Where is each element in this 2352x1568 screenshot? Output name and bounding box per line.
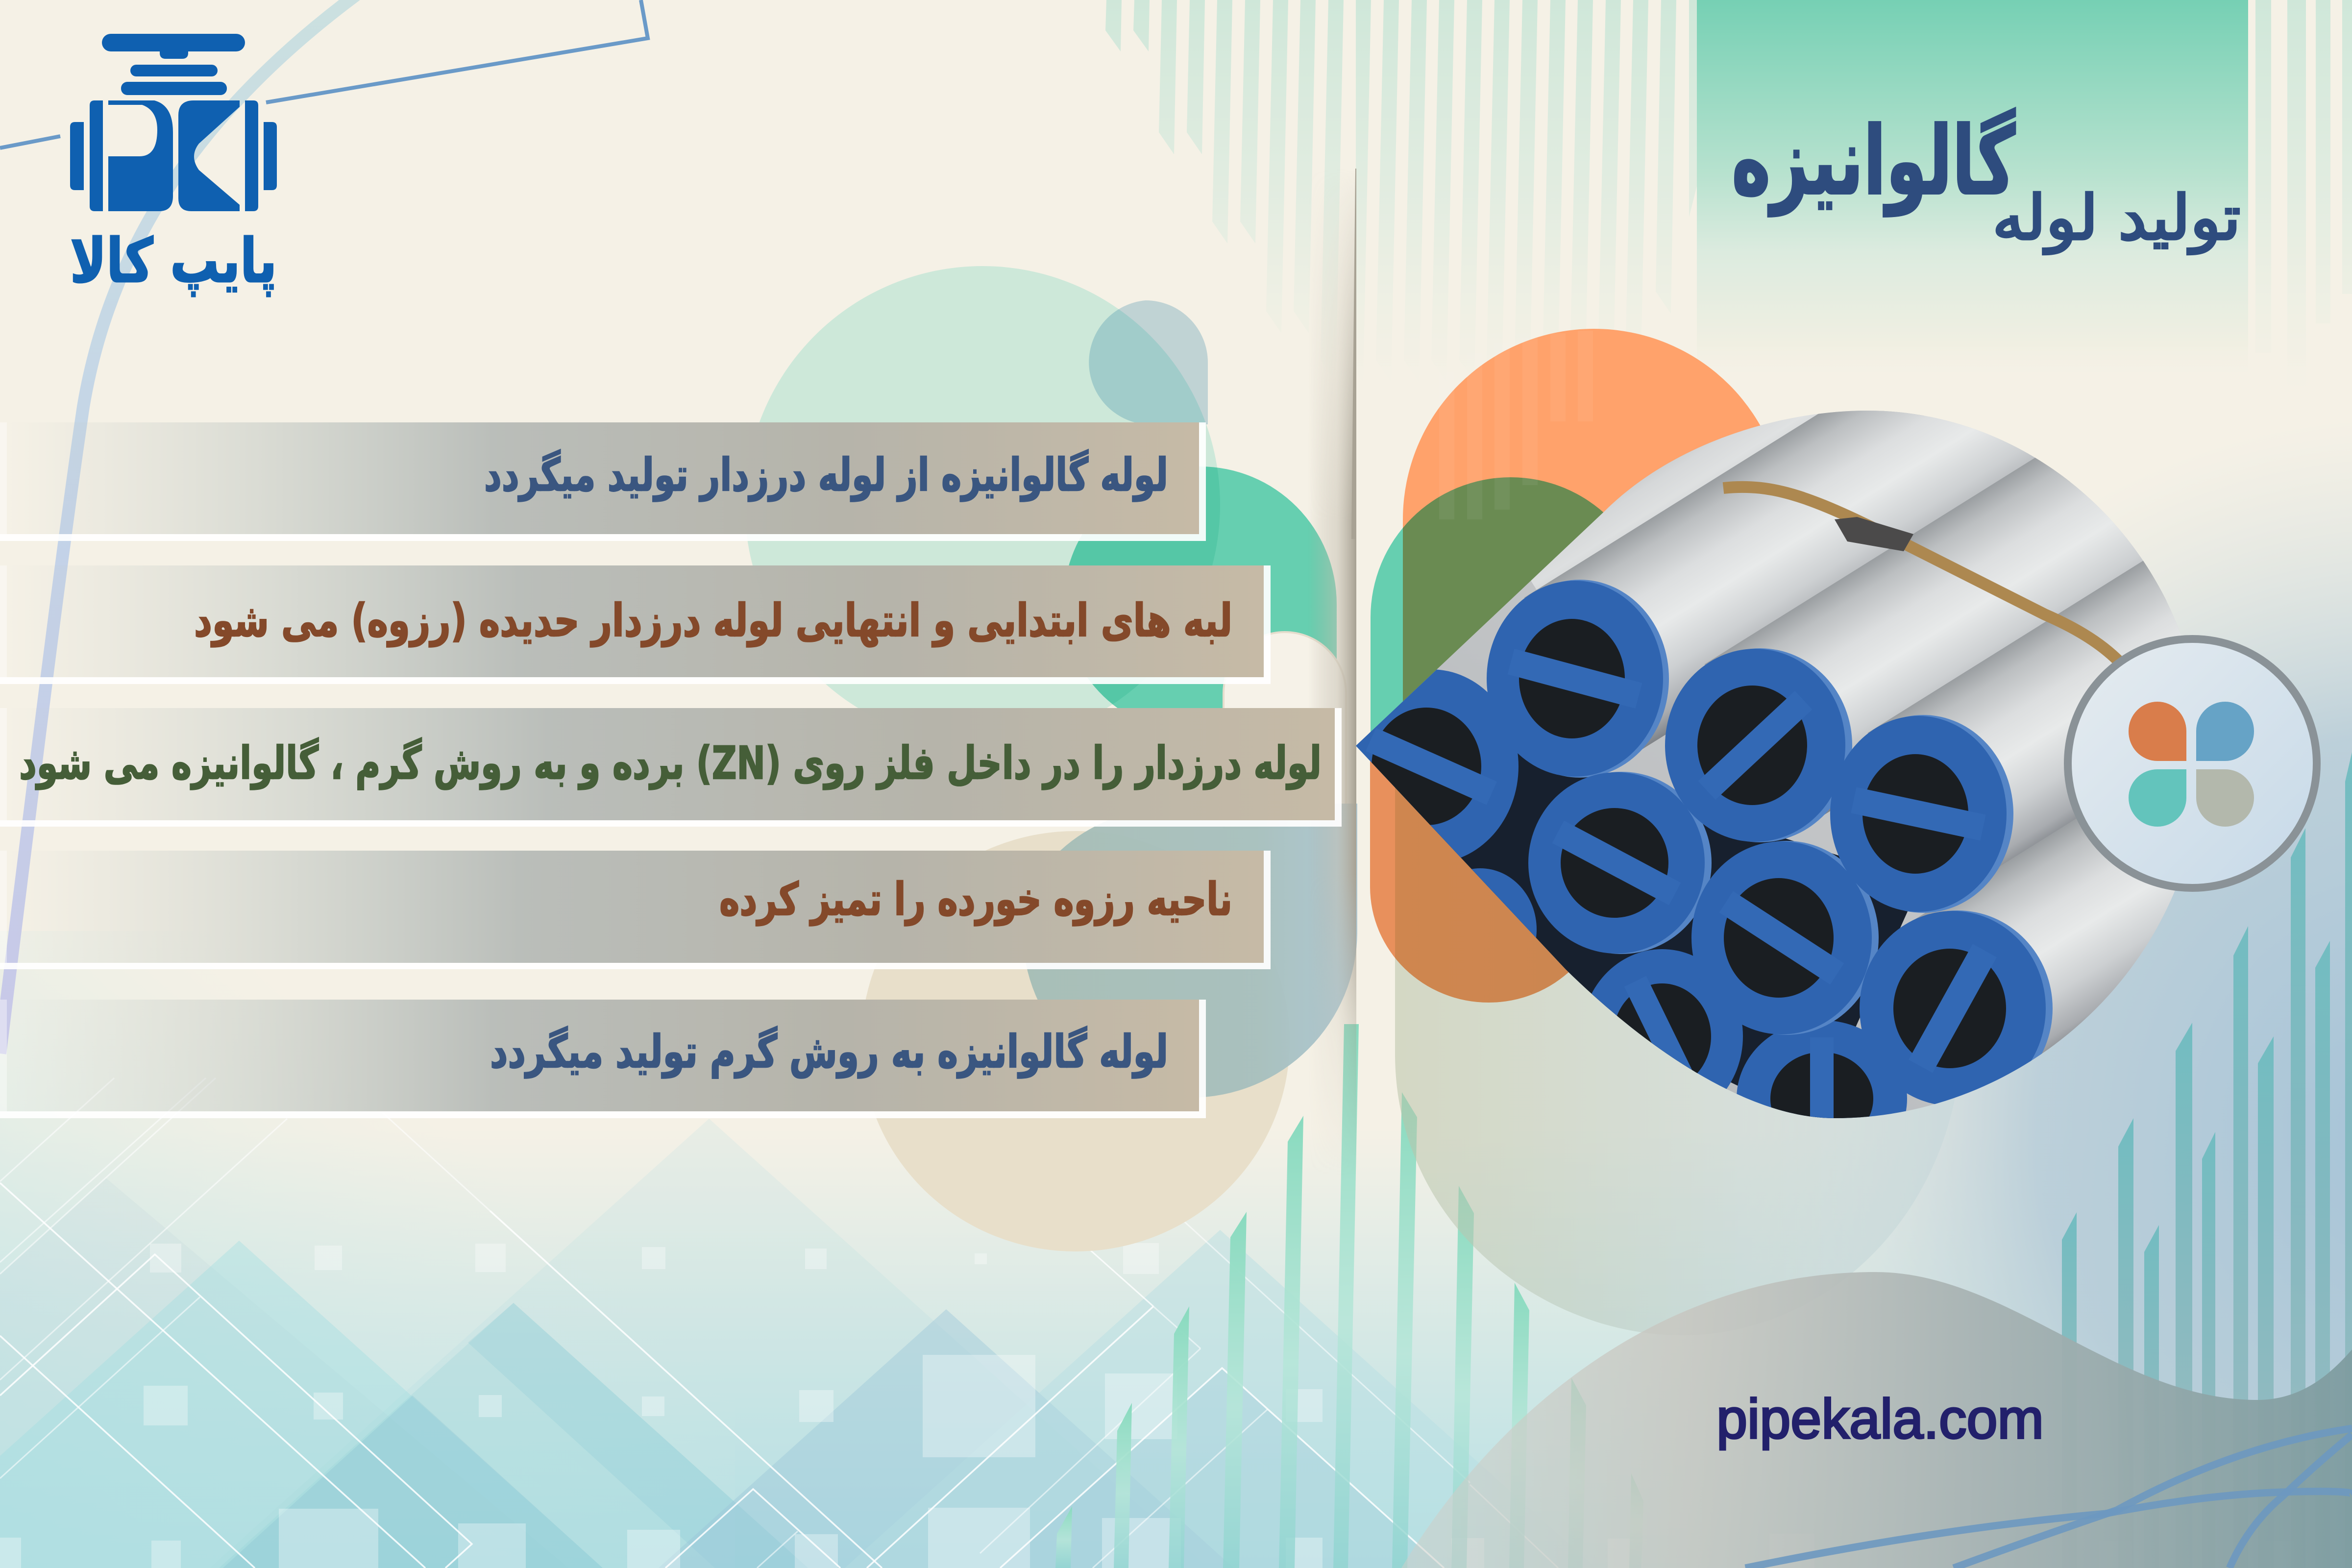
petal blue [2196,702,2254,761]
bottom stripes: teal centre [1055,1024,1643,1568]
tan circle [861,831,1290,1251]
step bar 4: ناحیه رزوه خورده را تمیز کرده [719,873,1232,926]
photo: galvanized pipes [1356,411,2176,1118]
decorative frame line [0,0,648,148]
title line 2: گالوانیزه [1732,107,2015,217]
valve body [70,100,277,211]
step bar 4 [0,851,1271,969]
step bar 3: لوله درزدار را در داخل فلز روی (ZN) برده و به روش گرم ، گالوانیزه می شود [19,737,1322,790]
cap [1344,669,1519,863]
website: pipekala.com [1716,1388,2044,1450]
pipe bodies [1499,219,2352,1089]
grey petal [1395,833,1962,1335]
cap [1830,715,2013,913]
orange dome [1403,329,1785,755]
bottom-right blue curves [1745,1428,2352,1568]
dark gaps [1367,745,1921,1122]
bottom stripes: blue-teal right [2062,752,2352,1568]
petal orange [2129,702,2186,761]
cap [1737,1020,1907,1177]
petal grey [2196,769,2254,827]
cap [1691,841,1879,1035]
logo wordmark: پایپ کالا [70,226,277,297]
strap [1723,487,2124,666]
step bar 5: لوله گالوانیزه به روش گرم تولید میگردد [490,1026,1168,1078]
vertical separator [1314,169,1356,1125]
step bar 3 [0,708,1342,827]
cream arch [1224,632,1346,828]
petal teal [2129,769,2186,827]
light green circle [745,266,1220,743]
step bar 5 [0,1000,1206,1118]
title panel [1697,0,2248,382]
orange lower petal [1370,746,1607,1003]
step bar 2: لبه های ابتدایی و انتهایی لوله درزدار حدیده (رزوه) می شود [194,594,1232,647]
cap [1424,868,1537,991]
blue-grey petal [1023,804,1357,1098]
green petal [1063,466,1337,735]
thin white lines [0,1078,1558,1568]
step bar 1 [0,422,1206,541]
teal dome [1371,477,1651,755]
bottom wave [1401,1272,2352,1568]
decorative curve left [0,0,363,1054]
top decorative stripes [1105,0,2352,392]
cap [1581,949,1743,1124]
badge: four-petal icon [2068,639,2317,888]
pipe caps [1344,580,2053,1177]
logo [70,34,277,297]
cap [1665,648,1852,842]
valve handle [102,34,245,95]
title line 1: تولید لوله [1992,182,2241,254]
cap [1860,910,2053,1106]
cap [1487,580,1669,778]
left decorative petals [745,266,1357,1251]
triangle pattern [0,1119,1595,1568]
step bar 1: لوله گالوانیزه از لوله درزدار تولید میگردد [484,449,1168,502]
faint stripes on dome [1439,331,1593,519]
cap [1528,772,1712,954]
white rectangles [0,1243,2294,1568]
step bar 2 [0,565,1271,684]
right petals behind photo [1370,329,1962,1335]
small teal petal [1089,300,1208,424]
